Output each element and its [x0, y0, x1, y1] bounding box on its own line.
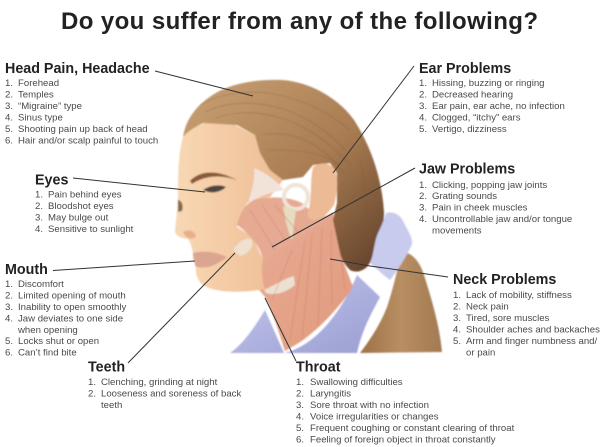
- pointer: teeth: [128, 253, 235, 363]
- panel: eyes: 2.: [35, 201, 43, 212]
- panel: ear problems: Decreased hearing: [432, 90, 513, 100]
- panel: throat: 2.: [296, 388, 304, 400]
- panel: throat: 4.: [296, 412, 304, 422]
- panel: eyes: [35, 172, 134, 235]
- panel: neck problems: or pain: [466, 348, 495, 358]
- panel: ear problems: 2.: [419, 90, 427, 100]
- panel: neck problems: 4.: [453, 324, 461, 336]
- muscle fibres: [250, 205, 345, 340]
- nostril shading: [183, 230, 196, 239]
- panel: head pain: 3.: [5, 101, 13, 112]
- panel: neck problems: [453, 272, 600, 358]
- panel: mouth: Discomfort: [18, 279, 64, 290]
- panel: throat: 5.: [296, 423, 304, 434]
- panel: mouth: 4.: [5, 314, 13, 324]
- panel: eyes: May bulge out: [48, 212, 109, 224]
- panel: mouth: 1.: [5, 279, 13, 290]
- panel: teeth: Clenching, grinding at night: [101, 377, 218, 388]
- panel: mouth: 3.: [5, 302, 13, 313]
- panel: head pain: Hair and/or scalp painful to touch: [18, 136, 158, 146]
- panel: jaw problems: 3.: [419, 202, 427, 214]
- panel: neck problems: Arm and finger numbness and/: [466, 336, 598, 347]
- panel: neck problems: Neck pain: [466, 302, 509, 312]
- panel: teeth: 1.: [88, 377, 96, 388]
- panel: neck problems: Shoulder aches and backaches: [466, 324, 600, 336]
- hyoid bone: [264, 276, 295, 294]
- panel: head pain: [5, 61, 158, 146]
- pointer: ear: [333, 66, 414, 173]
- panel: ear problems: 4.: [419, 112, 427, 124]
- teeth: [233, 238, 252, 256]
- panel: ear problems: Clogged, “itchy” ears: [432, 112, 521, 124]
- panel: jaw problems: movements: [432, 226, 482, 236]
- panel: jaw problems: 1.: [419, 180, 427, 191]
- title: Do you suffer from any of the following?: [61, 8, 538, 35]
- panel: neck problems: Lack of mobility, stiffness: [466, 290, 572, 301]
- panel: eyes: 1.: [35, 190, 43, 200]
- panel: neck problems: 5.: [453, 336, 461, 347]
- panel: teeth: Teeth: [88, 360, 125, 376]
- face skin: [175, 120, 283, 292]
- panel: head pain: 5.: [5, 124, 13, 135]
- panel: throat: 3.: [296, 400, 304, 411]
- eye: [203, 185, 226, 192]
- temple tendon: [248, 168, 284, 204]
- panel: jaw problems: [419, 162, 572, 236]
- panel: head pain: 6.: [5, 136, 13, 146]
- panel: ear problems: 1.: [419, 78, 427, 89]
- panel: ear problems: Ear pain, ear ache, no infection: [432, 101, 565, 112]
- cheek muscle patch: [237, 198, 333, 262]
- panel: neck problems: Neck Problems: [453, 272, 556, 288]
- panel: neck problems: Tired, sore muscles: [466, 313, 550, 324]
- panel: head pain: Shooting pain up back of head: [18, 124, 148, 135]
- panel: throat: Frequent coughing or constant clearing of throat: [310, 423, 515, 434]
- panel: throat: Voice irregularities or changes: [310, 412, 439, 422]
- panel: eyes: Sensitive to sunlight: [48, 224, 134, 235]
- panel: ear problems: 3.: [419, 101, 427, 112]
- shirt: [230, 275, 380, 353]
- panel: neck problems: 2.: [453, 302, 461, 312]
- illustration: woman's head and neck anatomy: [175, 80, 442, 353]
- panel: mouth: Limited opening of mouth: [18, 290, 126, 302]
- hair band: [370, 212, 412, 280]
- panel: teeth: Looseness and soreness of back: [101, 388, 241, 400]
- panel: neck problems: 1.: [453, 290, 461, 301]
- panel: teeth: teeth: [101, 400, 122, 411]
- panel: mouth: [5, 262, 126, 358]
- panel: jaw problems: Uncontrollable jaw and/or tongue: [432, 214, 572, 225]
- panel: mouth: 6.: [5, 348, 13, 358]
- lips: [193, 252, 227, 268]
- panel: jaw problems: Clicking, popping jaw joints: [432, 180, 547, 191]
- panel: head pain: “Migraine” type: [18, 101, 82, 112]
- panel: neck problems: 3.: [453, 313, 461, 324]
- panel: mouth: 2.: [5, 290, 13, 302]
- jaw bone: [283, 206, 296, 240]
- panel: jaw problems: 2.: [419, 191, 427, 202]
- panel: eyes: Bloodshot eyes: [48, 201, 114, 212]
- panel: jaw problems: Grating sounds: [432, 191, 497, 202]
- panel: mouth: Mouth: [5, 262, 48, 278]
- pointer: eyes: [73, 178, 205, 192]
- pointer: throat: [265, 298, 296, 361]
- panel: mouth: Locks shut or open: [18, 336, 99, 347]
- panel: throat: Sore throat with no infection: [310, 400, 429, 411]
- panel: mouth: Jaw deviates to one side: [18, 314, 123, 324]
- panel: mouth: when opening: [17, 325, 78, 336]
- ponytail: [360, 252, 442, 353]
- panel: throat: Feeling of foreign object in throat constantly: [310, 434, 496, 446]
- panel: mouth: Inability to open smoothly: [18, 302, 126, 313]
- eye (far side): [178, 200, 183, 212]
- panel: eyes: Pain behind eyes: [48, 190, 122, 200]
- neck muscles: [255, 212, 353, 351]
- panel: head pain: 4.: [5, 112, 13, 124]
- panel: eyes: 4.: [35, 224, 43, 235]
- pointer: mouth: [53, 261, 195, 270]
- panel: head pain: Forehead: [18, 78, 59, 89]
- panel: mouth: 5.: [5, 336, 13, 347]
- panel: throat: 6.: [296, 434, 304, 446]
- panel: head pain: Sinus type: [18, 112, 63, 124]
- ear: [308, 164, 337, 220]
- pointer: head: [155, 71, 253, 96]
- panel: ear problems: Hissing, buzzing or ringing: [432, 78, 545, 89]
- panel: mouth: Can’t find bite: [18, 348, 77, 358]
- panel: ear problems: Vertigo, dizziness: [432, 124, 507, 135]
- panel: throat: 1.: [296, 377, 304, 388]
- hair: [183, 80, 384, 272]
- hair strands: [200, 92, 366, 255]
- panel: ear problems: [419, 61, 565, 135]
- panel: head pain: 2.: [5, 90, 13, 100]
- pointer: neck: [330, 259, 448, 277]
- panel: eyes: 3.: [35, 212, 43, 224]
- panel: throat: Laryngitis: [310, 388, 351, 400]
- jaw joint: [284, 185, 308, 209]
- panel: teeth: 2.: [88, 388, 96, 400]
- panel: jaw problems: Pain in cheek muscles: [432, 202, 528, 214]
- panel: throat: Throat: [296, 360, 341, 376]
- panel: throat: Swallowing difficulties: [310, 377, 403, 388]
- panel: head pain: Temples: [18, 90, 54, 100]
- panel: throat: [296, 360, 515, 446]
- pointer: jaw: [272, 168, 415, 247]
- panel: eyes: Eyes: [35, 172, 68, 188]
- panel: teeth: [88, 360, 241, 411]
- eyebrow: [190, 173, 237, 184]
- panel: head pain: 1.: [5, 78, 13, 89]
- panel: ear problems: 5.: [419, 124, 427, 135]
- panel: head pain: Head Pain, Headache: [5, 61, 150, 77]
- panel: ear problems: Ear Problems: [419, 61, 511, 77]
- panel: jaw problems: 4.: [419, 214, 427, 225]
- panel: jaw problems: Jaw Problems: [419, 162, 515, 178]
